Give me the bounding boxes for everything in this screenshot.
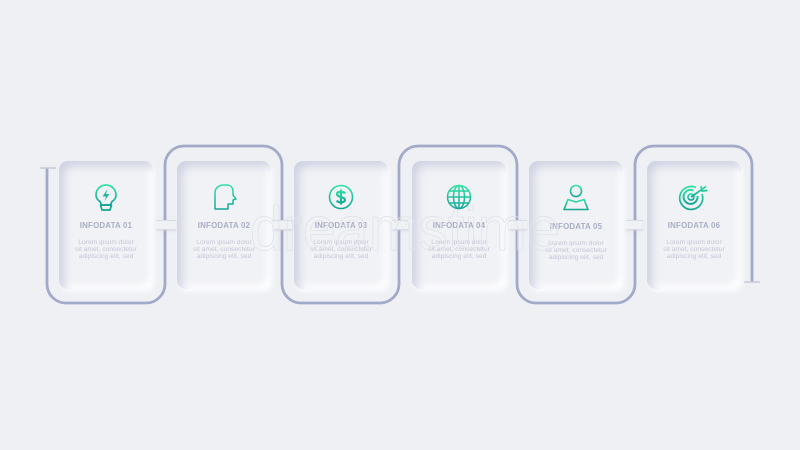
text block: sit amet, consectetur: [193, 246, 255, 253]
text block: Lorem ipsum dolor: [196, 239, 252, 246]
connector cap 3: [392, 220, 408, 230]
text block: Lorem ipsum dolor: [78, 239, 134, 246]
text block: [193, 239, 255, 260]
icon: target with arrow: [678, 186, 708, 210]
heading: INFODATA 04: [433, 221, 485, 230]
panel: infodata 04: [412, 161, 506, 289]
icon: light bulb: [95, 184, 117, 211]
text block: Lorem ipsum dolor: [548, 240, 604, 247]
text block: sit amet, consectetur: [75, 246, 137, 253]
text block: adipiscing elit, sed: [197, 253, 251, 260]
panel: infodata 06: [647, 161, 741, 289]
text block: adipiscing elit, sed: [79, 253, 133, 260]
text block: sit amet, consectetur: [310, 246, 372, 253]
text block: adipiscing elit, sed: [314, 253, 368, 260]
icon: head profile: [214, 184, 237, 210]
text block: sit amet, consectetur: [428, 246, 490, 253]
icon: dollar coin: [328, 184, 354, 210]
heading: INFODATA 03: [315, 221, 367, 230]
text block: [663, 239, 725, 260]
watermark: dreamstime: [250, 195, 560, 264]
text block: [310, 239, 372, 260]
heading: INFODATA 05: [550, 222, 602, 231]
panel: infodata 03: [294, 161, 388, 289]
heading: INFODATA 06: [668, 221, 720, 230]
text block: Lorem ipsum dolor: [313, 239, 369, 246]
connector cap 1: [156, 220, 176, 230]
text block: [545, 240, 607, 261]
connector cap 4: [509, 220, 527, 230]
text block: [428, 239, 490, 260]
text block: adipiscing elit, sed: [432, 253, 486, 260]
connector cap 2: [273, 220, 292, 230]
heading: INFODATA 01: [80, 221, 132, 230]
text block: Lorem ipsum dolor: [431, 239, 487, 246]
panel: infodata 05: [529, 161, 623, 289]
icon: globe: [446, 184, 472, 210]
panel: infodata 02: [177, 161, 271, 289]
text block: [75, 239, 137, 260]
text block: adipiscing elit, sed: [667, 253, 721, 260]
heading: INFODATA 02: [198, 221, 250, 230]
text block: sit amet, consectetur: [663, 246, 725, 253]
text block: adipiscing elit, sed: [549, 254, 603, 261]
connector cap 5: [625, 220, 643, 230]
text block: sit amet, consectetur: [545, 247, 607, 254]
text block: Lorem ipsum dolor: [666, 239, 722, 246]
icon: person on map: [563, 184, 589, 210]
panel: infodata 01: [59, 161, 153, 289]
